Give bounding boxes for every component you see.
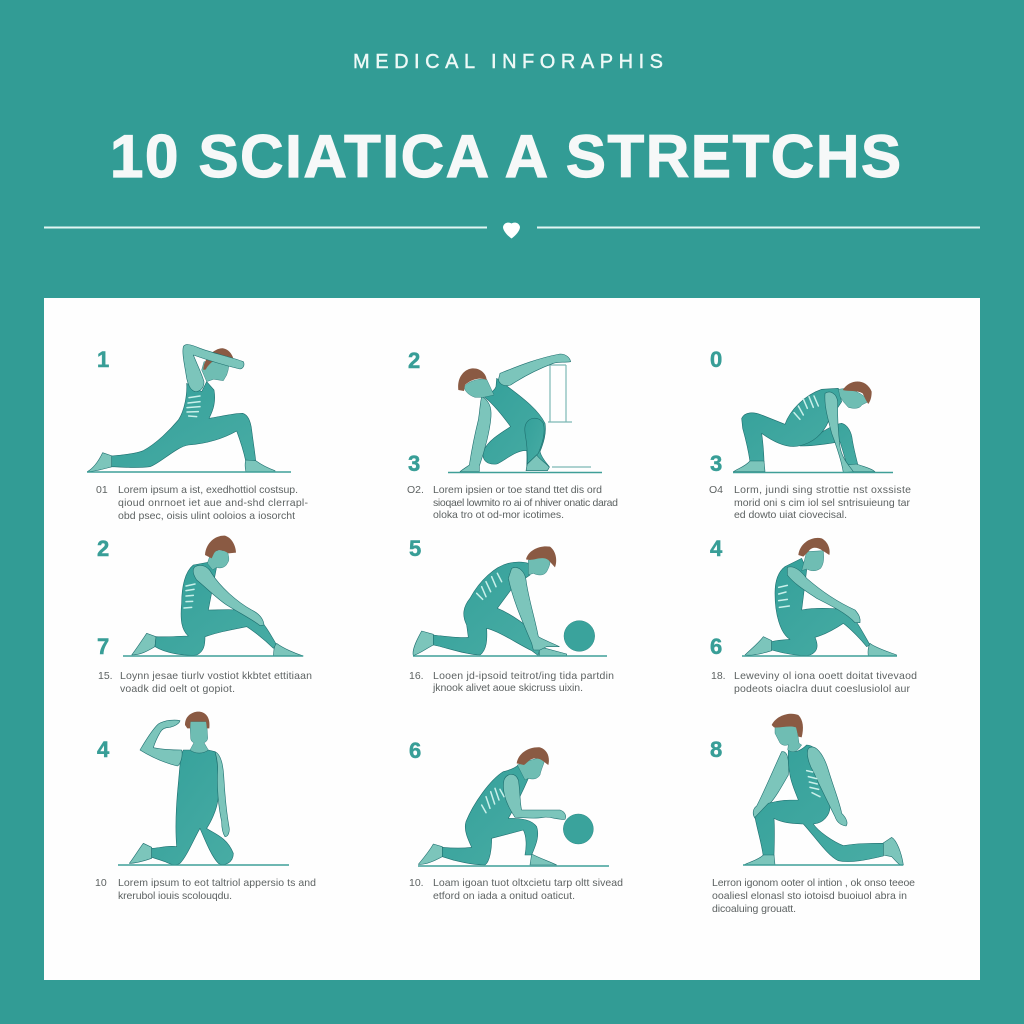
description: podeots oiaclra duut coeslusiolol aur — [734, 683, 910, 695]
ground line — [87, 471, 291, 473]
step number: 6 — [710, 634, 722, 659]
description: 18. — [711, 670, 726, 682]
step number: 4 — [710, 536, 723, 561]
title: 10 SCIATICA A STRETCHS — [110, 123, 901, 190]
description — [407, 484, 618, 521]
ground line — [742, 655, 897, 657]
description: O2. — [407, 484, 424, 496]
step number: 1 — [97, 347, 109, 372]
step 7: upright kneel with raised arm — [95, 712, 316, 902]
description — [712, 877, 915, 915]
description: 15. — [98, 670, 113, 682]
step 8: kneeling with ball — [409, 738, 623, 902]
figure: kneeling lunge — [744, 714, 903, 865]
description: jknook alivet aoue skicruss uixin. — [432, 682, 583, 694]
description: obd psec, oisis ulint ooloios a iosorcht — [118, 510, 295, 522]
description: 01 — [96, 484, 108, 496]
title divider with heart — [44, 223, 980, 238]
description: sioqael lowmito ro ai of nhiver onatic darad — [433, 497, 618, 509]
ball — [564, 621, 595, 651]
description: krerubol iouis scolouqdu. — [118, 890, 232, 902]
ground line — [123, 655, 303, 657]
panel: exercises card — [44, 298, 980, 980]
description: 10. — [409, 877, 424, 889]
ground line — [418, 865, 609, 867]
description — [96, 484, 308, 522]
figure: upright kneel — [129, 712, 233, 865]
description: O4 — [709, 484, 723, 496]
step number: 3 — [710, 451, 722, 476]
description: 10 — [95, 877, 107, 889]
step 9: kneeling lunge, hand on knee — [710, 714, 915, 915]
figure: seated lean — [132, 536, 303, 656]
description — [711, 670, 917, 695]
description: Lorem ipsum a ist, exedhottiol costsup. — [118, 484, 298, 496]
step number: 7 — [97, 634, 109, 659]
ground line — [733, 472, 893, 474]
description: Lorem ipsien or toe stand ttet dis ord — [433, 484, 602, 496]
description: Leweviny ol iona ooett doitat tivevaod — [734, 670, 917, 682]
step 4: seated forward hold — [97, 536, 312, 695]
eyebrow heading: MEDICAL INFORAPHIS — [353, 51, 663, 73]
description — [409, 877, 623, 902]
step 5: kneeling reach toward ball — [409, 536, 614, 694]
step number: 3 — [408, 451, 420, 476]
step number: 2 — [97, 536, 109, 561]
description: ed dowto uiat ciovecisal. — [734, 509, 847, 521]
ground line — [743, 864, 903, 866]
description: Loynn jesae tiurlv vostiot kkbtet ettitiaan — [120, 670, 312, 682]
step 2: kneeling side reach — [407, 348, 618, 521]
description: qioud onrnoet iet aue and-shd clerrapl- — [118, 497, 308, 509]
description: morid oni s cim iol sel sntrisuieung tar — [734, 497, 910, 509]
description: 16. — [409, 670, 424, 682]
figure: kneeling reach — [413, 546, 595, 656]
step 6: seated forward hold, right column — [710, 536, 917, 695]
ground line — [118, 864, 289, 866]
apparatus posts — [547, 365, 591, 467]
description — [98, 670, 312, 695]
step number: 5 — [409, 536, 421, 561]
description — [709, 484, 911, 521]
step number: 2 — [408, 348, 420, 373]
description: dicoaluing grouatt. — [712, 903, 796, 915]
description: Looen jd-ipsoid teitrot/ing tida partdin — [433, 670, 614, 682]
figure: seated lean — [745, 538, 897, 656]
step 1: lunge with arm overhead — [87, 345, 308, 522]
description: voadk did oelt ot gopiot. — [120, 683, 235, 695]
figure: squat fold — [733, 381, 875, 473]
description: Lerron igonom ooter ol intion , ok onso teeoe — [712, 877, 915, 889]
figure: kneeling with ball — [418, 747, 593, 865]
step number: 6 — [409, 738, 421, 763]
description: ooaliesl elonasl sto iotoisd buoiuol abra in — [712, 890, 907, 902]
description — [409, 670, 614, 694]
description: Lorm, jundi sing strottie nst oxssiste — [734, 484, 911, 496]
ground line — [448, 472, 602, 474]
figure: side reach — [458, 354, 571, 472]
step number: 0 — [710, 347, 722, 372]
figure: lunge — [87, 345, 275, 472]
description: etford on iada a onitud oaticut. — [433, 890, 575, 902]
ball — [563, 814, 593, 844]
description: Loam igoan tuot oltxcietu tarp oltt sivead — [433, 877, 623, 889]
step number: 4 — [97, 737, 110, 762]
step number: 8 — [710, 737, 722, 762]
description — [95, 877, 316, 902]
description: oloka tro ot od-mor icotimes. — [433, 509, 564, 521]
step 3: low squat forward fold — [709, 347, 911, 521]
description: Lorem ipsum to eot taltriol appersio ts and — [118, 877, 316, 889]
ground line — [413, 655, 607, 657]
